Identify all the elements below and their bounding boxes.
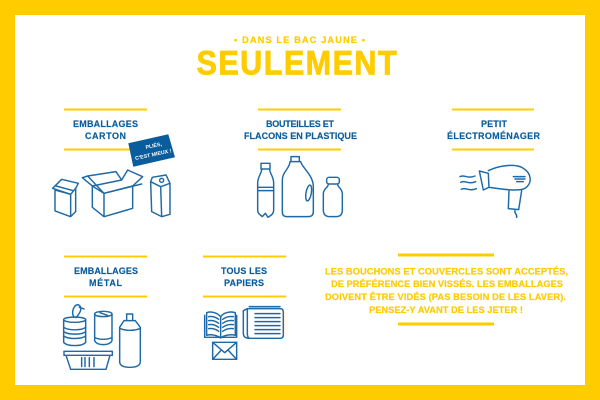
icon: bottles bbox=[258, 157, 342, 217]
heading: petit électroménager: PETIT bbox=[481, 119, 508, 129]
panel: emballages métal bbox=[64, 256, 147, 369]
heading: emballages métal: EMBALLAGES bbox=[74, 266, 138, 276]
heading: tous les papiers: TOUS LES bbox=[221, 266, 267, 276]
title: SEULEMENT bbox=[196, 44, 398, 82]
badge: pliés c'est mieux: PLIÉS, bbox=[145, 140, 163, 151]
heading: bouteilles et flacons: BOUTEILLES ET bbox=[266, 119, 334, 129]
badge: pliés c'est mieux: C'EST MIEUX ! bbox=[135, 148, 172, 162]
badge: pliés c'est mieux bbox=[128, 134, 175, 167]
heading: emballages carton bbox=[64, 110, 147, 150]
heading: bouteilles et flacons: FLACONS EN PLASTIQUE bbox=[244, 131, 357, 141]
heading: emballages carton: EMBALLAGES bbox=[73, 119, 138, 129]
callout text bbox=[325, 266, 568, 315]
callout text: PENSEZ-Y AVANT DE LES JETER ! bbox=[369, 305, 523, 315]
panel: bouteilles et flacons bbox=[244, 110, 357, 217]
panel: emballages carton bbox=[53, 110, 175, 217]
heading: tous les papiers bbox=[203, 256, 286, 296]
heading: emballages carton: CARTON bbox=[85, 131, 126, 141]
icon: hair dryer bbox=[460, 165, 530, 217]
heading: emballages métal bbox=[64, 256, 147, 296]
kicker: • DANS LE BAC JAUNE • bbox=[234, 35, 365, 45]
heading: petit électroménager bbox=[447, 110, 540, 150]
icon: papers bbox=[205, 307, 283, 359]
panel: tous les papiers bbox=[203, 256, 286, 359]
heading: tous les papiers: PAPIERS bbox=[224, 278, 264, 288]
heading: petit électroménager: ÉLECTROMÉNAGER bbox=[447, 131, 540, 141]
icon: metal packaging bbox=[64, 305, 140, 369]
callout: consignes bbox=[325, 254, 568, 326]
heading: emballages métal: MÉTAL bbox=[89, 278, 122, 288]
icon: cartons bbox=[53, 170, 170, 217]
callout text: DE PRÉFÉRENCE BIEN VISSÉS. LES EMBALLAGES bbox=[331, 279, 563, 289]
callout text: DOIVENT ÊTRE VIDÉS (PAS BESOIN DE LES LAVER). bbox=[325, 291, 566, 302]
panel: petit électroménager bbox=[447, 110, 540, 217]
callout text: LES BOUCHONS ET COUVERCLES SONT ACCEPTÉS, bbox=[325, 266, 568, 276]
heading: bouteilles et flacons bbox=[244, 110, 357, 150]
